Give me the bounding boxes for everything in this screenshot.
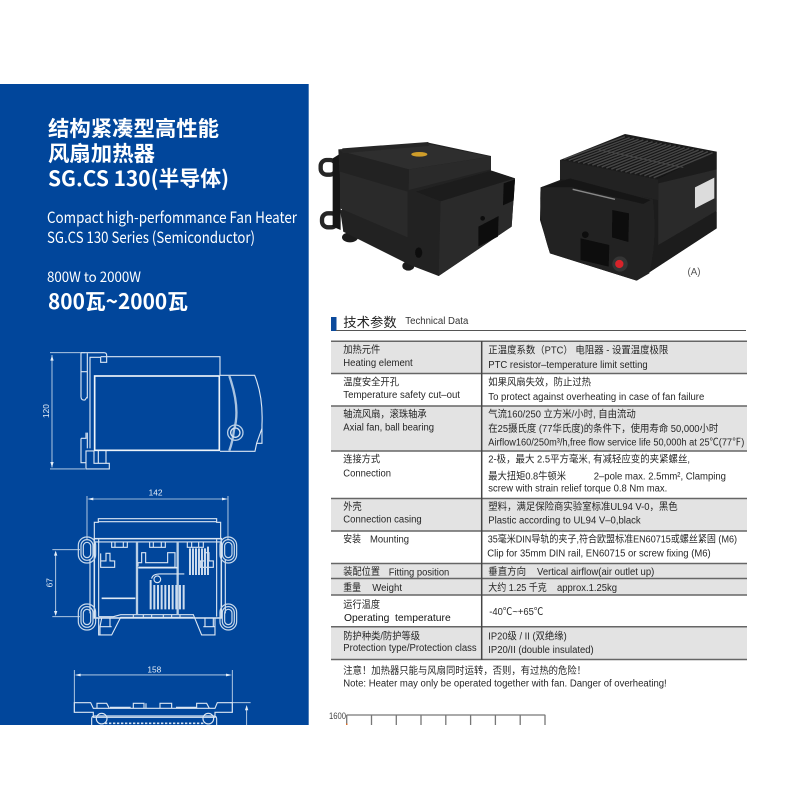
row: protection class: IP20级 / II (双绝缘) — [488, 630, 567, 643]
table row backgrounds — [331, 341, 747, 659]
text: power range: 800W to 2000W — [47, 267, 141, 287]
callout: overheating note — [343, 664, 667, 690]
table rules — [331, 341, 747, 660]
text: English product subtitle — [48, 210, 297, 246]
row: heating element — [343, 343, 668, 371]
row: weight: Weight — [372, 583, 402, 594]
row: weight — [343, 581, 617, 594]
row: axial fan: 轴流风扇，滚珠轴承 — [343, 408, 427, 421]
row: weight: 重量 — [343, 581, 361, 594]
drawing: front view with 142 and 67 dimensions: 67 — [45, 578, 55, 587]
row: connection casing: Connection casing — [343, 514, 422, 525]
row: axial fan: Airflow160/250m³/h,free flow service life 50,000h at 25℃(77℉) — [488, 438, 744, 449]
row: fitting position: Vertical airflow(air outlet up) — [537, 567, 654, 578]
row: axial fan — [343, 408, 744, 449]
row: operating temperature — [343, 598, 543, 624]
row: mounting: 安装 — [343, 533, 361, 546]
row: connection: 2–pole max. 2.5mm², Clamping — [594, 471, 726, 482]
row: protection class: Protection type/Protection class — [343, 643, 477, 654]
drawing: side view with 120 dimension — [41, 353, 262, 469]
row: fitting position: Fitting position — [389, 568, 449, 579]
heater body shading — [540, 134, 717, 281]
chart: power curve top edge — [329, 711, 545, 725]
chart: power curve top edge: 1600 — [329, 711, 346, 722]
row: operating temperature: 运行温度 — [343, 598, 380, 611]
row: weight: approx.1.25kg — [557, 583, 617, 594]
drawing: front view with 142 and 67 dimensions — [45, 488, 237, 635]
row: operating temperature: Operating temperature — [344, 612, 451, 624]
row: connection casing — [343, 500, 678, 527]
text: English product subtitle: Compact high-perfommance Fan Heater — [47, 206, 298, 228]
row: mounting: 35毫米DIN导轨的夹子,符合欧盟标准EN60715或螺丝紧固 (M6) — [488, 533, 737, 546]
drawing: side view with 120 dimension: 120 — [41, 404, 51, 418]
icon: mounting bracket ears — [321, 160, 337, 227]
row: connection: 连接方式 — [343, 453, 380, 466]
row: connection: 最大扭矩0.8牛顿米 — [488, 469, 566, 482]
text: English product subtitle: SG.CS 130 Series (Semiconductor) — [47, 226, 255, 248]
row: connection — [343, 453, 726, 494]
text: power range: 800瓦~2000瓦 — [48, 286, 188, 316]
product photo: front view heater with knob — [540, 134, 717, 281]
heading: technical data: 技术参数 — [343, 315, 397, 330]
heater body shading — [333, 142, 515, 276]
drawing: bottom view with 158 dimension: 158 — [147, 664, 162, 674]
table: technical data — [331, 341, 747, 660]
panel: blue product sidebar — [0, 84, 309, 727]
row: heating element: PTC resistor–temperature limit setting — [488, 360, 648, 371]
row: temperature safety cut-out: 如果风扇失效，防止过热 — [488, 375, 591, 388]
row: operating temperature: -40℃~+65℃ — [489, 607, 543, 618]
row: mounting: Mounting — [370, 535, 409, 546]
label: variant A: (A) — [688, 266, 700, 278]
row: connection casing: 外壳 — [343, 500, 362, 513]
infographic page — [0, 84, 747, 725]
row: temperature safety cut-out: To protect against overheating in case of fan failure — [488, 392, 705, 403]
heading: Chinese product title: 风扇加热器 — [48, 138, 155, 168]
row: temperature safety cut-out: Temperature safety cut–out — [343, 390, 460, 401]
row: fitting position: 装配位置 — [343, 565, 380, 578]
row: fitting position: 垂直方向 — [488, 565, 526, 578]
heading: technical data — [331, 315, 746, 331]
heading: Chinese product title: 结构紧凑型高性能 — [48, 113, 219, 143]
product photo: rear view heater — [321, 142, 515, 276]
callout: overheating note: Note: Heater may only be operated together with fan. Danger of overheating! — [343, 679, 667, 690]
text: power range — [48, 272, 188, 312]
row: heating element: 正温度系数（PTC） 电阻器 - 设置温度极限 — [488, 343, 668, 356]
row: connection: 2-极，最大 2.5平方毫米, 有减轻应变的夹紧螺丝, — [488, 453, 690, 466]
row: axial fan: Axial fan, ball bearing — [343, 423, 434, 434]
row: protection class: 防护种类/防护等级 — [343, 630, 420, 643]
drawing: bottom view with 158 dimension — [74, 664, 251, 727]
row: mounting: Clip for 35mm DIN rail, EN60715 or screw fixing (M6) — [487, 549, 711, 560]
heading: Chinese product title — [48, 113, 229, 193]
row: temperature safety cut-out — [343, 375, 705, 403]
row: fitting position — [343, 565, 654, 579]
row: mounting — [343, 533, 737, 560]
heading: Chinese product title: SG.CS 130(半导体) — [48, 163, 229, 193]
icon: red temperature knob — [615, 260, 623, 268]
row: heating element: Heating element — [343, 358, 413, 369]
row: weight: 大约 1.25 千克 — [488, 581, 547, 594]
row: axial fan: 在25摄氏度 (77华氏度)的条件下，使用寿命 50,000小时 — [488, 422, 718, 435]
row: axial fan: 气流160/250 立方米/小时, 自由流动 — [488, 408, 636, 421]
drawing: front view with 142 and 67 dimensions: 142 — [149, 488, 163, 498]
heading: technical data: Technical Data — [405, 316, 469, 327]
callout: overheating note: 注意！加热器只能与风扇同时运转，否则，有过热的危险！ — [343, 664, 586, 677]
row: temperature safety cut-out: 温度安全开孔 — [343, 375, 399, 388]
row: protection class: IP20/II (double insulated) — [488, 645, 594, 656]
row: protection class — [343, 630, 594, 656]
row: connection: screw with strain relief torque 0.8 Nm max. — [488, 483, 667, 494]
row: connection: Connection — [343, 468, 391, 479]
row: connection casing: 塑料，满足保险商实验室标准UL94 V-0，黑色 — [488, 500, 678, 513]
row: heating element: 加热元件 — [343, 343, 380, 356]
row: connection casing: Plastic according to UL94 V–0,black — [488, 516, 642, 527]
